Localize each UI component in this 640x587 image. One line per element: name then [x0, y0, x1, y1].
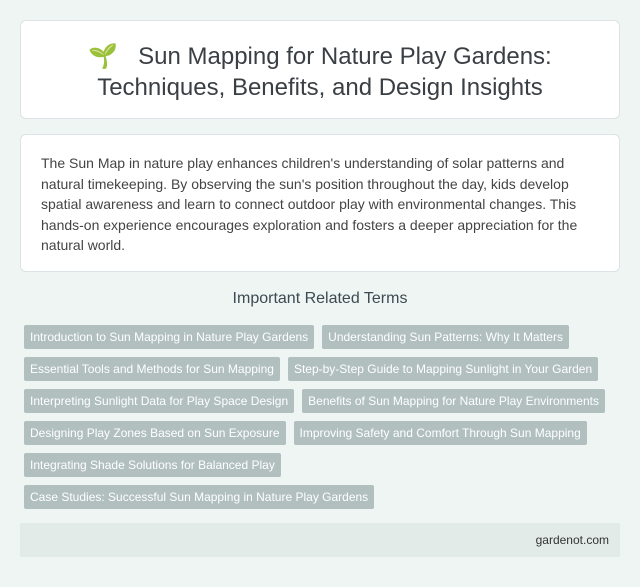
terms heading: Important Related Terms [233, 290, 407, 307]
related terms tags: Introduction to Sun Mapping in Nature Play Gardens [30, 330, 308, 344]
related terms tags [24, 325, 605, 509]
related terms tags: Benefits of Sun Mapping for Nature Play Environments [308, 394, 599, 408]
description panel [20, 134, 620, 272]
related terms tags: Interpreting Sunlight Data for Play Space Design [30, 394, 288, 408]
title text: Techniques, Benefits, and Design Insights [97, 74, 543, 101]
related terms tags: Essential Tools and Methods for Sun Mapping [30, 362, 274, 376]
related terms tags: Step-by-Step Guide to Mapping Sunlight in Your Garden [294, 362, 592, 376]
footer: gardenot.com [536, 533, 609, 547]
title text [88, 43, 552, 101]
related terms tags: Improving Safety and Comfort Through Sun Mapping [300, 426, 581, 440]
title panel [20, 20, 620, 119]
related terms tags: Designing Play Zones Based on Sun Exposure [30, 426, 280, 440]
related terms tags: Understanding Sun Patterns: Why It Matters [328, 330, 563, 344]
footer [20, 523, 620, 557]
title text: 🌱 Sun Mapping for Nature Play Gardens: [88, 43, 552, 70]
related terms tags: Case Studies: Successful Sun Mapping in Nature Play Gardens [30, 490, 368, 504]
related terms tags: Integrating Shade Solutions for Balanced Play [30, 458, 275, 472]
description panel: The Sun Map in nature play enhances children's understanding of solar patterns and natural timekeeping. By observing the sun's position throughout the day, kids develop spatial awareness and learn to connect outdoor play with environmental changes. This hands-on experience encourages exploration and fosters a deeper appreciation for the natural world. [41, 155, 577, 253]
